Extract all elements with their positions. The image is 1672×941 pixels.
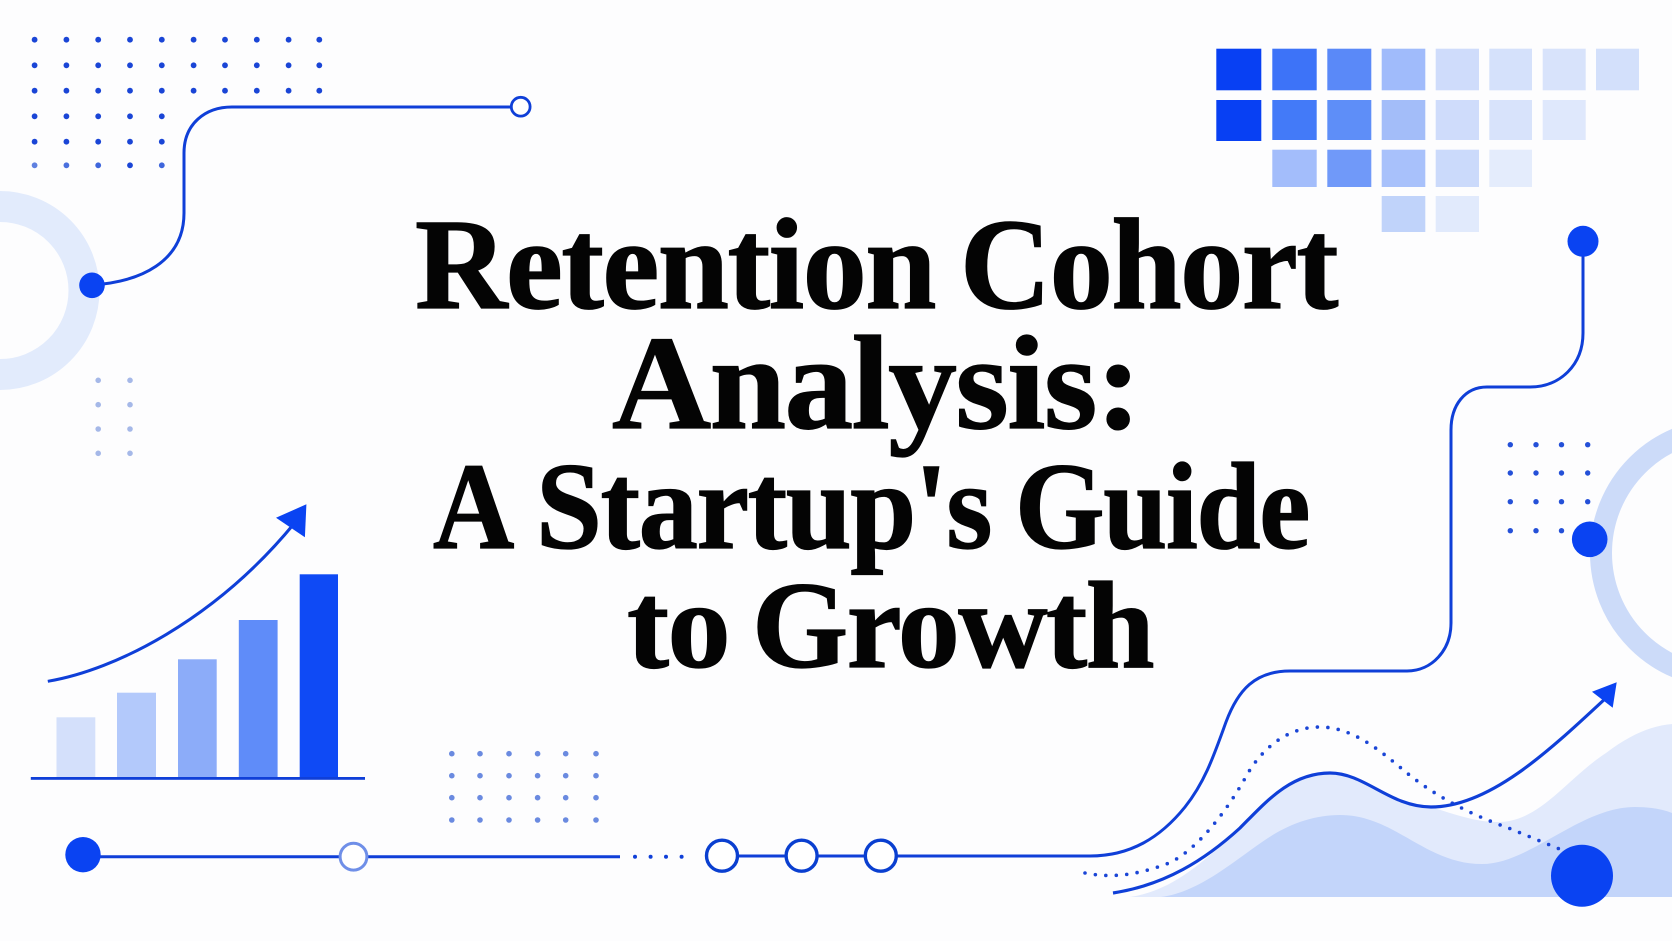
trend: arrow line bottom right [1113,682,1617,893]
timeline: bottom [65,837,900,872]
connector: top left line with nodes [79,97,530,298]
decorative ring: right [1601,429,1672,677]
node: open 2 [786,840,817,871]
title: A [433,438,514,575]
title [415,193,1338,694]
title: to [627,557,729,694]
title: Startup's [536,438,991,575]
node: open 1 [706,840,738,871]
bar 1 [56,717,95,778]
trend arrow head [276,504,306,537]
dot grid: faint left [95,378,133,456]
arrow head [1592,682,1617,708]
dot grid: top left [32,37,322,168]
decorative ring: left [0,206,84,374]
node: faded open [340,843,367,870]
node: open end [511,97,530,116]
bar 2 [117,693,156,778]
bar 3 [178,659,217,778]
title: Guide [1015,438,1309,575]
node: on right ring [1572,522,1607,557]
area: light back wave [1130,724,1672,897]
node: large bottom right [1551,845,1613,907]
title: Growth [752,557,1154,694]
area chart: bottom right [1130,724,1672,897]
node: filled start [65,837,101,872]
title: Retention [415,193,935,337]
dot grid: bottom centre [449,751,599,823]
bar 5 [300,574,338,778]
bar 4 [239,620,278,778]
trend arrow line [48,523,295,681]
dot grid: right [1508,442,1590,533]
cohort heatmap grid: top right [1216,49,1639,232]
baseline [31,777,365,780]
timeline: small dots [633,855,684,859]
trend: dotted line [1085,727,1562,876]
bar chart: growth [31,504,365,780]
title: Cohort [960,193,1338,337]
node: filled start [79,272,105,298]
node: open 3 [865,840,896,871]
area: front wave [1161,807,1672,897]
title: Analysis: [612,309,1140,457]
node: top right [1568,226,1598,257]
connector: right line from top node to timeline [830,226,1598,856]
